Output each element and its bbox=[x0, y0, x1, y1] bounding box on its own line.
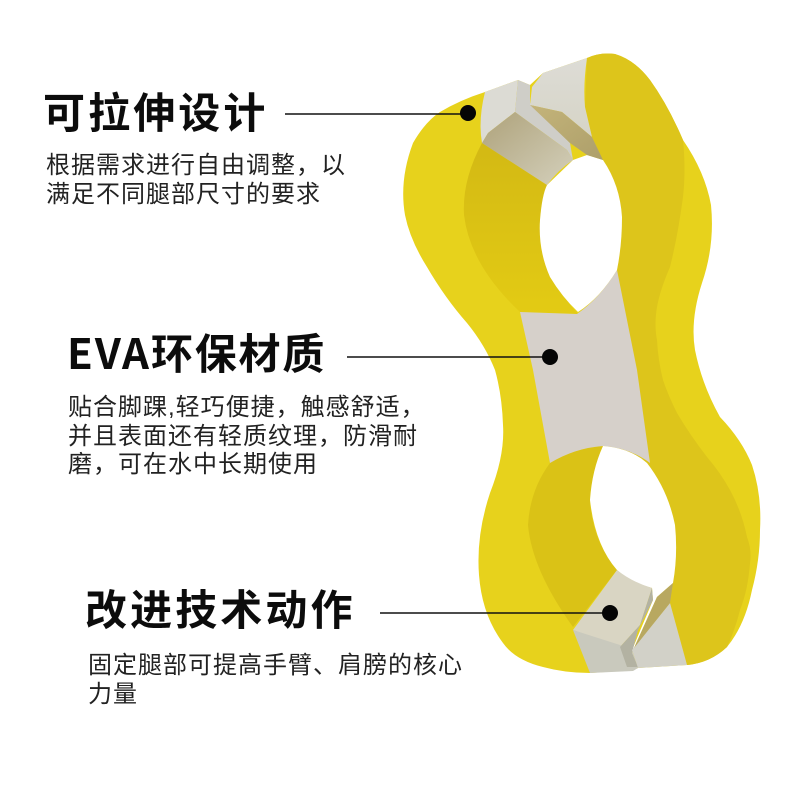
text block: stretchable design bbox=[46, 152, 346, 208]
text block: improve technique: 力量 bbox=[88, 681, 138, 708]
heading: improve technique: 改进技术动作 bbox=[85, 587, 356, 634]
float body silhouette bbox=[403, 54, 760, 673]
text block: EVA material: 磨，可在水中长期使用 bbox=[68, 451, 318, 478]
lower inner wall bbox=[528, 446, 617, 627]
text block: improve technique bbox=[88, 652, 463, 708]
top-right white cap bbox=[530, 58, 603, 160]
text block: stretchable design: 满足不同腿部尺寸的要求 bbox=[46, 181, 321, 208]
text block: stretchable design: 根据需求进行自由调整，以 bbox=[46, 152, 346, 179]
text block: improve technique: 固定腿部可提高手臂、肩膀的核心 bbox=[88, 652, 463, 679]
text block: EVA material: 并且表面还有轻质纹理，防滑耐 bbox=[68, 423, 418, 450]
heading: stretchable design: 可拉伸设计 bbox=[43, 90, 269, 137]
upper inner wall bbox=[464, 143, 578, 314]
bottom-left white cap bbox=[573, 570, 653, 673]
text block: EVA material bbox=[68, 394, 426, 478]
bottom-right white cap bbox=[632, 583, 687, 668]
upper hole bbox=[540, 155, 622, 312]
heading: EVA material: EVA环保材质 bbox=[67, 321, 326, 382]
top-left white cap bbox=[481, 80, 573, 185]
lower hole and gap between caps bbox=[590, 446, 676, 650]
text block: EVA material: 贴合脚踝,轻巧便捷，触感舒适， bbox=[68, 394, 426, 421]
darker right face bbox=[585, 54, 751, 665]
central white band bbox=[520, 270, 650, 463]
